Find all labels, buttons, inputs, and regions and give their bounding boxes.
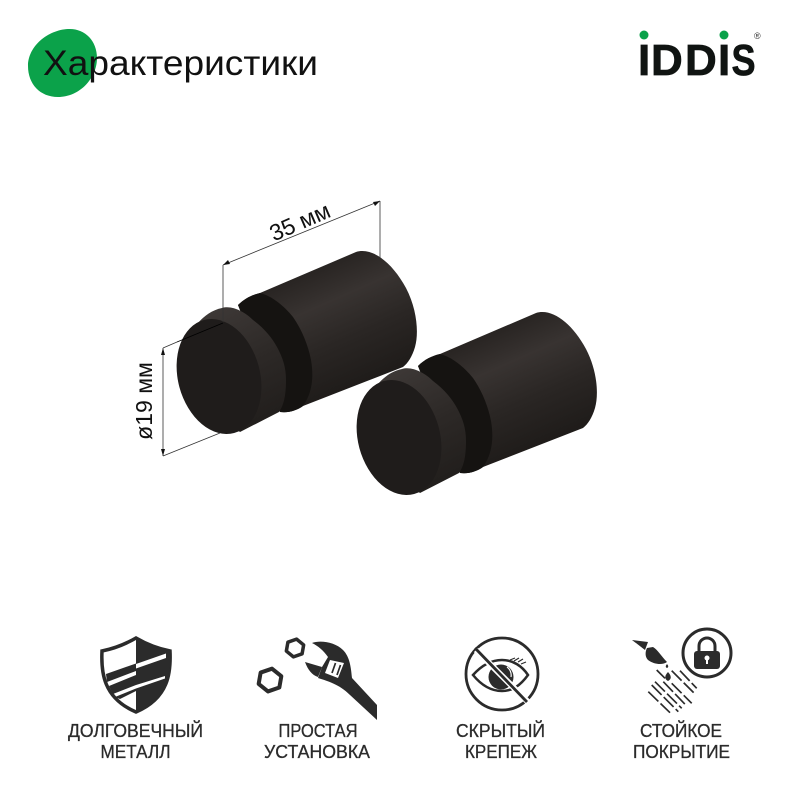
label: СКРЫТЫЙ КРЕПЕЖ: СКРЫТЫЙ [456,720,545,741]
product photo: right hook [344,312,597,505]
title: Характеристики [43,44,318,83]
label: ДОЛГОВЕЧНЫЙ МЕТАЛЛ: ДОЛГОВЕЧНЫЙ [68,720,203,741]
label: СТОЙКОЕ ПОКРЫТИЕ: СТОЙКОЕ [640,720,722,741]
label: СКРЫТЫЙ КРЕПЕЖ [456,720,545,762]
label: ДОЛГОВЕЧНЫЙ МЕТАЛЛ: МЕТАЛЛ [100,742,170,762]
icon: wrench and nuts [258,638,377,720]
dimension: length 35 mm [223,197,380,322]
product photo: left hook [164,251,417,444]
icon: crossed eye [466,638,538,710]
label: СТОЙКОЕ ПОКРЫТИЕ [633,720,730,762]
label: СТОЙКОЕ ПОКРЫТИЕ: ПОКРЫТИЕ [633,742,730,762]
logo: IDDIS: ® [754,31,761,41]
label: ПРОСТАЯ УСТАНОВКА: УСТАНОВКА [264,742,370,762]
icon: brush, paint and lock [632,629,731,713]
label: ДОЛГОВЕЧНЫЙ МЕТАЛЛ [68,720,203,762]
dimension: diameter 19 mm [131,323,223,456]
label: СКРЫТЫЙ КРЕПЕЖ: КРЕПЕЖ [465,742,537,762]
logo: IDDIS: IDDI [638,36,730,85]
logo: IDDIS [638,30,761,85]
label: ПРОСТАЯ УСТАНОВКА: ПРОСТАЯ [278,721,358,741]
green blob behind title [28,29,97,97]
dimension: diameter 19 mm: ø19 мм [131,362,157,440]
dimension: length 35 mm: 35 мм [265,197,334,246]
icon: shield [102,638,170,712]
label: ПРОСТАЯ УСТАНОВКА [264,721,370,762]
logo: IDDIS: S [732,36,756,85]
